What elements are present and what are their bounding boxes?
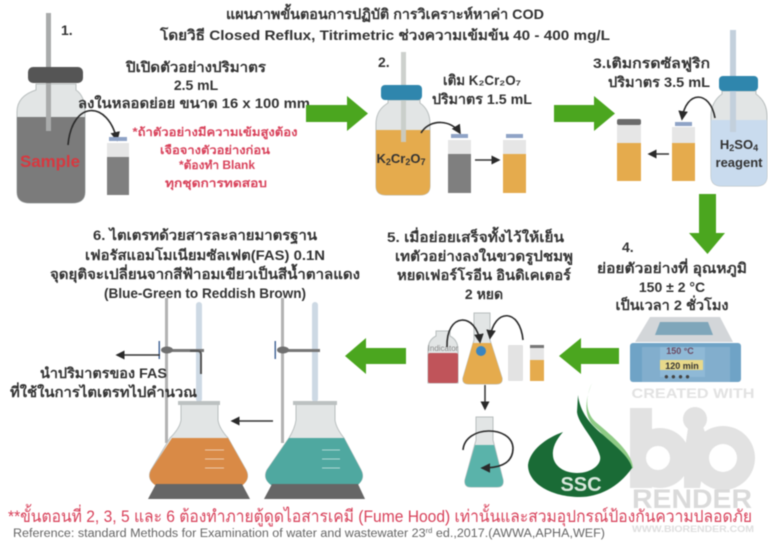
reference citation: ed.,2017.(AWWA,APHA,WEF)	[432, 528, 605, 540]
step 4 instruction text: 150 ± 2 °C	[639, 279, 705, 295]
logo: SSC	[528, 383, 633, 497]
icon: H2SO4 bottle	[711, 30, 767, 186]
step 1 warning note	[132, 126, 298, 191]
icon: titration setup teal	[264, 298, 365, 499]
icon: empty vial	[508, 345, 523, 381]
icon: capped vial	[617, 119, 641, 181]
icon: H2SO4 bottle: 4	[753, 143, 758, 153]
step 2 instruction text: เติม K₂Cr₂O₇	[443, 72, 521, 88]
icon: heating block: ● ● ● ●	[664, 372, 690, 381]
icon: sample bottle: Sample	[20, 152, 80, 171]
icon: K2Cr2O7 bottle: 2	[386, 157, 391, 167]
arrow: between flasks	[232, 420, 273, 422]
arrows: pouring curves	[447, 316, 523, 347]
watermark: BioRender: CREATED WITH	[632, 385, 754, 401]
text: FAS calculation note: นำปริมาตรของ FAS	[40, 365, 167, 381]
icon: heating block: 120 min	[665, 361, 699, 371]
step 6 instruction text	[50, 226, 360, 301]
step 3 instruction text	[593, 55, 710, 90]
arrow: sample to vial	[68, 111, 117, 145]
step 6 instruction text: จุดยุติจะเปลี่ยนจากสีฟ้าอมเขียวเป็นสีน้ำตาลแดง	[50, 263, 360, 283]
step 1 number: 1.	[61, 22, 73, 38]
icon: sample vial	[107, 137, 129, 195]
icon: indicator bottle: Indicator	[428, 344, 459, 353]
icon: K2Cr2O7 bottle: Cr	[391, 151, 405, 166]
step 2 instruction text: ปริมาตร 1.5 mL	[432, 91, 532, 107]
step 4 instruction text: 4.	[622, 239, 634, 255]
icon: H2SO4 bottle: SO	[734, 137, 753, 152]
step 1 instruction text: ปิเปิดตัวอย่างปริมาตร	[124, 59, 267, 75]
icon: K2Cr2O7 bottle	[376, 52, 430, 195]
arrow: vial to capped vial	[649, 153, 669, 155]
icon: heating block: 150 °C	[666, 346, 694, 356]
icon: H2SO4 bottle: 2	[729, 143, 734, 153]
arrow: step 4 to 5	[559, 338, 619, 374]
step 3 instruction text: 3.เติมกรดซัลฟูริก	[593, 55, 710, 72]
icon: yellow vial	[530, 345, 544, 381]
icon: K2Cr2O7 bottle: O	[410, 151, 420, 166]
step 2 number: 2.	[378, 54, 390, 70]
watermark: BioRender	[630, 385, 755, 534]
step 3 instruction text: ปริมาตร 3.5 mL	[608, 74, 710, 90]
arrow: step 5 to 6	[345, 338, 406, 374]
icon: heating block	[630, 317, 741, 382]
step 2 instruction text	[432, 72, 532, 107]
arrow: step 2 to 3	[554, 96, 615, 131]
step 5 instruction text: เทตัวอย่างลงในขวดรูปชมพู	[395, 247, 573, 265]
step 1 instruction text: ลงในหลอดย่อย ขนาด 16 x 100 mm	[78, 94, 310, 111]
step 5 instruction text	[387, 226, 573, 302]
title	[159, 3, 610, 43]
icon: titration setup orange	[148, 298, 250, 499]
logo: SSC: SSC	[560, 474, 602, 496]
title: แผนภาพขั้นตอนการปฏิบัติ การวิเคราะห์หาค่า COD	[226, 3, 544, 23]
icon: K2Cr2O7 bottle: 7	[420, 157, 426, 167]
icon: K2Cr2O7 bottle: 2	[405, 157, 410, 167]
icon: teal flask	[463, 417, 513, 487]
step 6 instruction text: 6. ไตเตรทด้วยสารละลายมาตรฐาน	[93, 226, 317, 245]
arrow: FAS volume	[117, 354, 160, 356]
icon: vial with sample	[448, 134, 471, 193]
step 6 instruction text: เฟอรัสแอมโมเนียมซัลเฟต(FAS) 0.1N	[85, 246, 325, 263]
reference citation: rd	[426, 528, 433, 535]
step 1 warning note: *ถ้าตัวอย่างมีความเข้มสูงต้อง	[132, 126, 298, 140]
step 5 instruction text: 2 หยด	[465, 286, 503, 302]
arrow: acid to vial	[682, 97, 715, 119]
text: FAS calculation note	[10, 365, 197, 400]
icon: H2SO4 bottle: H	[720, 137, 729, 152]
step 1 warning note: เจือจางตัวอย่างก่อน	[160, 144, 270, 157]
step 4 instruction text: เป็นเวลา 2 ชั่วโมง	[616, 295, 729, 313]
step 1 warning note: *ต้องทำ Blank	[179, 158, 256, 172]
step 1 warning note: ทุกชุดการทดสอบ	[165, 178, 267, 191]
arrow: K2Cr2O7 to vial	[421, 122, 460, 133]
arrow: step 3 to 4	[689, 194, 725, 254]
icon: H2SO4 bottle: reagent	[716, 155, 763, 170]
step 5 instruction text: หยดเฟอร์โรอีน อินดิเคเตอร์	[397, 266, 571, 283]
step 6 instruction text: (Blue-Green to Reddish Brown)	[104, 285, 306, 301]
reference citation: Reference: standard Methods for Examination of water and wastewater 23	[13, 528, 391, 540]
step 4 instruction text: ย่อยตัวอย่างที่ อุณหภูมิ	[597, 258, 747, 277]
title: โดยวิธี Closed Reflux, Titrimetric ช่วงความเข้มข้น 40 - 400 mg/L	[159, 26, 610, 43]
icon: indicator bottle	[428, 331, 459, 383]
icon: vial with dichromate	[503, 134, 526, 193]
icon: K2Cr2O7 bottle: K	[376, 151, 386, 166]
watermark: BioRender: WWW.BIORENDER.COM	[632, 524, 754, 534]
arrow: vial to vial	[475, 159, 499, 161]
step 1 instruction text	[78, 59, 310, 111]
step 1 instruction text: 2.5 mL	[174, 77, 219, 93]
text: FAS calculation note: ที่ใช้ในการไตเตรทไปคำนวณ	[10, 382, 197, 400]
step 5 instruction text: 5. เมื่อย่อยเสร็จทั้งไว้ให้เย็น	[387, 226, 564, 245]
icon: Erlenmeyer flask with indicator	[463, 313, 502, 384]
step 4 instruction text	[597, 239, 747, 313]
watermark: BioRender: RENDER	[632, 484, 752, 514]
arrow: flask down	[484, 385, 486, 409]
icon: sample bottle	[17, 13, 85, 203]
icon: vial with acid	[672, 122, 695, 181]
arrow: step 1 to 2	[306, 96, 368, 131]
